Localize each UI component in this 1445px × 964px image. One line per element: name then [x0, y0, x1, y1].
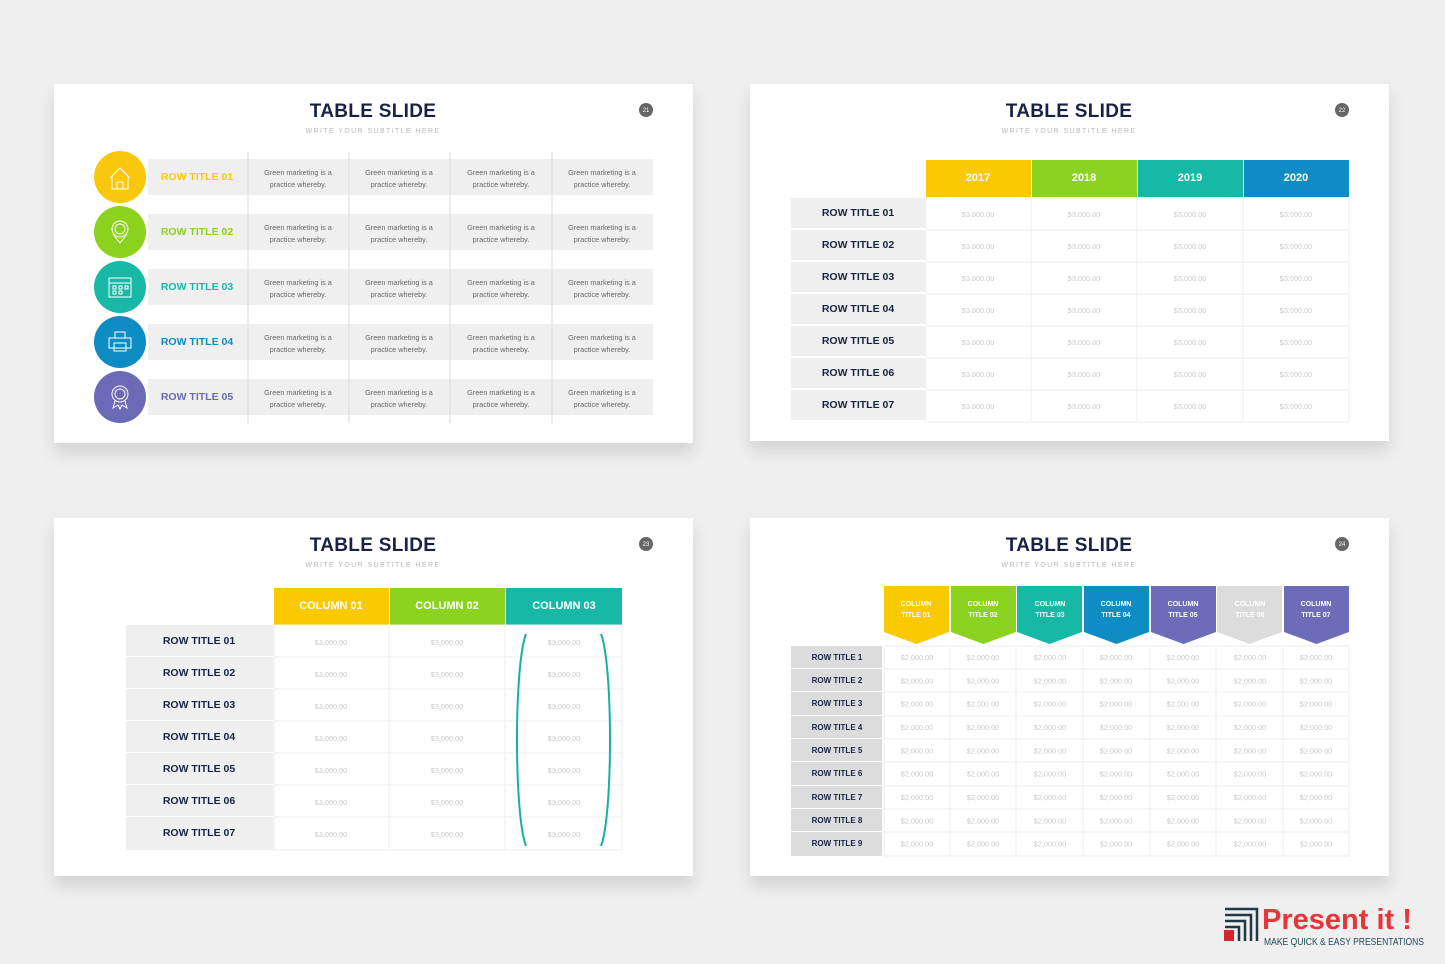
chevron headers: COLUMN: [1168, 601, 1198, 608]
data table: $3,000.00: [962, 210, 994, 219]
row titles: ROW TITLE 04: [161, 336, 233, 348]
cell texts: Green marketing is a: [365, 278, 434, 287]
data table: $2,000.00: [1234, 770, 1266, 779]
data table: $3,000.00: [1174, 402, 1206, 411]
data table: $2,000.00: [1234, 746, 1266, 755]
column header: [274, 588, 622, 625]
data table: $3,000.00: [1174, 306, 1206, 315]
cell texts: Green marketing is a: [264, 168, 333, 177]
chevron headers: COLUMN: [1301, 601, 1331, 608]
data table: ROW TITLE 02: [822, 239, 894, 251]
title: TABLE SLIDE: [1006, 101, 1132, 122]
data table: $3,000.00: [962, 402, 994, 411]
title: [306, 535, 440, 569]
cell texts: practice whereby.: [574, 290, 630, 299]
year header: 2017: [966, 172, 990, 184]
data table: $3,000.00: [548, 670, 580, 679]
chevron headers: TITLE 07: [1301, 612, 1331, 619]
cell texts: practice whereby.: [473, 290, 529, 299]
data table: $2,000.00: [1234, 653, 1266, 662]
cell texts: practice whereby.: [371, 400, 427, 409]
cell texts: Green marketing is a: [568, 223, 637, 232]
cell texts: Green marketing is a: [467, 388, 536, 397]
data table: ROW TITLE 04: [822, 303, 894, 315]
data table: $2,000.00: [1300, 840, 1332, 849]
data table: ROW TITLE 3: [812, 699, 863, 708]
data table: $2,000.00: [967, 793, 999, 802]
cell texts: Green marketing is a: [264, 223, 333, 232]
page number: 22: [1339, 108, 1346, 114]
page number: [639, 537, 653, 551]
page number: 24: [1339, 542, 1346, 548]
table rows: [148, 152, 653, 423]
column header: COLUMN 03: [532, 600, 596, 612]
data table: $3,000.00: [431, 734, 463, 743]
title: WRITE YOUR SUBTITLE HERE: [1002, 128, 1136, 135]
data table: ROW TITLE 07: [163, 827, 235, 839]
data table: $2,000.00: [1300, 746, 1332, 755]
data table: ROW TITLE 07: [822, 399, 894, 411]
data table: $3,000.00: [315, 638, 347, 647]
title: [306, 101, 440, 135]
chevron headers: TITLE 05: [1168, 612, 1198, 619]
data table: $2,000.00: [1100, 816, 1132, 825]
chevron headers: [884, 586, 1349, 644]
data table: $2,000.00: [1034, 770, 1066, 779]
data table: $3,000.00: [1280, 210, 1312, 219]
data table: $2,000.00: [1167, 676, 1199, 685]
page number: [1335, 103, 1349, 117]
data table: $2,000.00: [967, 840, 999, 849]
data table: $3,000.00: [962, 370, 994, 379]
chevron headers: TITLE 01: [901, 612, 931, 619]
data table: $3,000.00: [1174, 242, 1206, 251]
year header: 2018: [1072, 172, 1096, 184]
data table: ROW TITLE 8: [812, 816, 863, 825]
year header: 2020: [1284, 172, 1308, 184]
data table: $3,000.00: [548, 766, 580, 775]
data table: $3,000.00: [431, 766, 463, 775]
title: [1002, 535, 1136, 569]
cell texts: Green marketing is a: [568, 168, 637, 177]
data table: $2,000.00: [901, 793, 933, 802]
cell texts: practice whereby.: [270, 290, 326, 299]
data table: $2,000.00: [901, 676, 933, 685]
data table: $3,000.00: [431, 638, 463, 647]
data table: ROW TITLE 05: [163, 763, 235, 775]
cell texts: practice whereby.: [473, 345, 529, 354]
cell texts: Green marketing is a: [365, 168, 434, 177]
data table: $3,000.00: [1068, 370, 1100, 379]
cell texts: Green marketing is a: [365, 223, 434, 232]
row titles: ROW TITLE 02: [161, 226, 233, 238]
panel: slide 21: [54, 84, 693, 443]
data table: ROW TITLE 04: [163, 731, 235, 743]
data table: $2,000.00: [901, 746, 933, 755]
data table: $2,000.00: [1300, 816, 1332, 825]
data table: $2,000.00: [1234, 676, 1266, 685]
data table: $2,000.00: [1100, 676, 1132, 685]
title: TABLE SLIDE: [310, 535, 436, 556]
data table: $2,000.00: [901, 816, 933, 825]
data table: $3,000.00: [1068, 210, 1100, 219]
cell texts: Green marketing is a: [568, 388, 637, 397]
data table: $2,000.00: [1034, 793, 1066, 802]
data table: $2,000.00: [901, 723, 933, 732]
data table: $3,000.00: [315, 734, 347, 743]
cell texts: [264, 168, 637, 409]
chevron headers: TITLE 02: [968, 612, 998, 619]
cell texts: practice whereby.: [371, 235, 427, 244]
cell texts: Green marketing is a: [467, 168, 536, 177]
icon circles: [94, 151, 146, 423]
data table: $3,000.00: [1068, 274, 1100, 283]
data table: $2,000.00: [1100, 700, 1132, 709]
data table: $3,000.00: [315, 798, 347, 807]
column header: COLUMN 02: [415, 600, 479, 612]
cell texts: practice whereby.: [270, 400, 326, 409]
chevron headers: TITLE 06: [1235, 612, 1265, 619]
data table: $3,000.00: [1174, 274, 1206, 283]
data table: $2,000.00: [1034, 700, 1066, 709]
page number: [639, 103, 653, 117]
data table: $2,000.00: [967, 770, 999, 779]
cell texts: Green marketing is a: [365, 388, 434, 397]
cell texts: practice whereby.: [371, 180, 427, 189]
data table: $3,000.00: [962, 306, 994, 315]
data table: $3,000.00: [1280, 338, 1312, 347]
data table: $2,000.00: [967, 676, 999, 685]
data table: $3,000.00: [315, 830, 347, 839]
chevron headers: COLUMN: [968, 601, 998, 608]
data table: ROW TITLE 6: [812, 769, 863, 778]
data table: ROW TITLE 03: [822, 271, 894, 283]
data table: $3,000.00: [548, 638, 580, 647]
cell texts: Green marketing is a: [467, 278, 536, 287]
row titles: ROW TITLE 03: [161, 281, 233, 293]
data table: $3,000.00: [1174, 210, 1206, 219]
data table: $3,000.00: [1068, 306, 1100, 315]
data table: $2,000.00: [1034, 653, 1066, 662]
data table: $3,000.00: [1280, 370, 1312, 379]
data table: $2,000.00: [1300, 676, 1332, 685]
cell texts: Green marketing is a: [467, 333, 536, 342]
logo: Present it: [1224, 904, 1424, 948]
data table: $3,000.00: [1068, 402, 1100, 411]
data table: ROW TITLE 02: [163, 667, 235, 679]
data table: ROW TITLE 03: [163, 699, 235, 711]
data table: ROW TITLE 01: [822, 207, 894, 219]
cell texts: Green marketing is a: [568, 278, 637, 287]
data table: $3,000.00: [548, 702, 580, 711]
title: TABLE SLIDE: [310, 101, 436, 122]
data table: $2,000.00: [967, 700, 999, 709]
cell texts: Green marketing is a: [365, 333, 434, 342]
panel: slide 23: [54, 518, 693, 876]
data table: [791, 198, 1349, 422]
title: WRITE YOUR SUBTITLE HERE: [1002, 562, 1136, 569]
panel: slide 24: [750, 518, 1389, 876]
cell texts: Green marketing is a: [264, 278, 333, 287]
data table: [126, 625, 622, 850]
data table: $2,000.00: [1300, 723, 1332, 732]
title: WRITE YOUR SUBTITLE HERE: [306, 562, 440, 569]
icon: logo mark: [1225, 909, 1257, 941]
data table: $2,000.00: [1300, 700, 1332, 709]
data table: ROW TITLE 7: [812, 793, 863, 802]
row titles: ROW TITLE 05: [161, 391, 233, 403]
chevron headers: COLUMN: [1101, 601, 1131, 608]
title: [1002, 101, 1136, 135]
cell texts: practice whereby.: [574, 180, 630, 189]
highlight brackets: [517, 634, 610, 846]
cell texts: practice whereby.: [270, 235, 326, 244]
data table: $2,000.00: [1100, 793, 1132, 802]
data table: $2,000.00: [967, 723, 999, 732]
cell texts: practice whereby.: [371, 345, 427, 354]
data table: $2,000.00: [967, 816, 999, 825]
cell texts: Green marketing is a: [467, 223, 536, 232]
chevron headers: COLUMN: [901, 601, 931, 608]
cell texts: practice whereby.: [473, 235, 529, 244]
chevron headers: TITLE 03: [1035, 612, 1065, 619]
data table: $3,000.00: [1280, 402, 1312, 411]
data table: $2,000.00: [1234, 840, 1266, 849]
cell texts: practice whereby.: [270, 345, 326, 354]
cell texts: Green marketing is a: [264, 333, 333, 342]
data table: $2,000.00: [1234, 700, 1266, 709]
data table: $2,000.00: [901, 840, 933, 849]
cell texts: practice whereby.: [574, 400, 630, 409]
chevron headers: TITLE 04: [1101, 612, 1131, 619]
page number: 23: [643, 542, 650, 548]
cell texts: practice whereby.: [574, 235, 630, 244]
data table: $3,000.00: [1174, 338, 1206, 347]
cell texts: practice whereby.: [473, 180, 529, 189]
data table: $3,000.00: [1068, 242, 1100, 251]
cell texts: practice whereby.: [574, 345, 630, 354]
cell texts: Green marketing is a: [264, 388, 333, 397]
chevron headers: COLUMN: [1035, 601, 1065, 608]
data table: $3,000.00: [315, 766, 347, 775]
data table: ROW TITLE 05: [822, 335, 894, 347]
data table: $3,000.00: [1280, 306, 1312, 315]
data table: $2,000.00: [1034, 746, 1066, 755]
data table: $2,000.00: [1167, 723, 1199, 732]
data table: $3,000.00: [1280, 242, 1312, 251]
data table: $2,000.00: [1100, 840, 1132, 849]
data table: $2,000.00: [901, 770, 933, 779]
data table: $3,000.00: [548, 830, 580, 839]
data table: $2,000.00: [1234, 723, 1266, 732]
year header: 2019: [1178, 172, 1202, 184]
data table: $2,000.00: [1100, 653, 1132, 662]
data table: $2,000.00: [1300, 770, 1332, 779]
data table: $2,000.00: [1034, 723, 1066, 732]
data table: $3,000.00: [962, 242, 994, 251]
data table: $2,000.00: [1167, 840, 1199, 849]
logo: Present it: Present it !: [1262, 904, 1412, 936]
data table: $2,000.00: [1300, 793, 1332, 802]
row titles: [161, 171, 233, 403]
panel: slide 22: [750, 84, 1389, 441]
data table: $2,000.00: [901, 700, 933, 709]
data table: ROW TITLE 2: [812, 676, 863, 685]
data table: $3,000.00: [962, 274, 994, 283]
data table: ROW TITLE 1: [812, 653, 863, 662]
data table: $2,000.00: [1034, 840, 1066, 849]
data table: ROW TITLE 06: [163, 795, 235, 807]
data table: $2,000.00: [1234, 816, 1266, 825]
row titles: ROW TITLE 01: [161, 171, 233, 183]
data table: $3,000.00: [431, 670, 463, 679]
data table: ROW TITLE 01: [163, 635, 235, 647]
page number: [1335, 537, 1349, 551]
year header: [926, 160, 1349, 197]
data table: $3,000.00: [431, 798, 463, 807]
data table: $2,000.00: [1234, 793, 1266, 802]
data table: ROW TITLE 06: [822, 367, 894, 379]
data table: $2,000.00: [1034, 676, 1066, 685]
data table: $2,000.00: [1167, 770, 1199, 779]
cell texts: practice whereby.: [371, 290, 427, 299]
data table: ROW TITLE 9: [812, 839, 863, 848]
data table: $2,000.00: [1100, 770, 1132, 779]
data table: $3,000.00: [431, 702, 463, 711]
data table: ROW TITLE 5: [812, 746, 863, 755]
data table: $2,000.00: [1300, 653, 1332, 662]
data table: $2,000.00: [1167, 746, 1199, 755]
column header: COLUMN 01: [299, 600, 363, 612]
data table: $2,000.00: [1167, 653, 1199, 662]
data table: $2,000.00: [1167, 793, 1199, 802]
data table: $3,000.00: [315, 702, 347, 711]
data table: $3,000.00: [431, 830, 463, 839]
data table: $2,000.00: [1167, 816, 1199, 825]
data table: $2,000.00: [1034, 816, 1066, 825]
data table: $3,000.00: [315, 670, 347, 679]
data table: $3,000.00: [1174, 370, 1206, 379]
data table: $2,000.00: [967, 746, 999, 755]
data table: $2,000.00: [1100, 723, 1132, 732]
data table: $3,000.00: [962, 338, 994, 347]
chevron headers: COLUMN: [1235, 601, 1265, 608]
data table: $2,000.00: [1167, 700, 1199, 709]
cell texts: practice whereby.: [473, 400, 529, 409]
data table: $3,000.00: [1068, 338, 1100, 347]
data table: $3,000.00: [1280, 274, 1312, 283]
data table: $2,000.00: [901, 653, 933, 662]
title: TABLE SLIDE: [1006, 535, 1132, 556]
data table: $3,000.00: [548, 798, 580, 807]
data table: $2,000.00: [1100, 746, 1132, 755]
data table: $2,000.00: [967, 653, 999, 662]
title: WRITE YOUR SUBTITLE HERE: [306, 128, 440, 135]
page number: 21: [643, 108, 650, 114]
cell texts: practice whereby.: [270, 180, 326, 189]
data table: ROW TITLE 4: [812, 723, 863, 732]
cell texts: Green marketing is a: [568, 333, 637, 342]
data table: [791, 646, 1349, 856]
data table: $3,000.00: [548, 734, 580, 743]
